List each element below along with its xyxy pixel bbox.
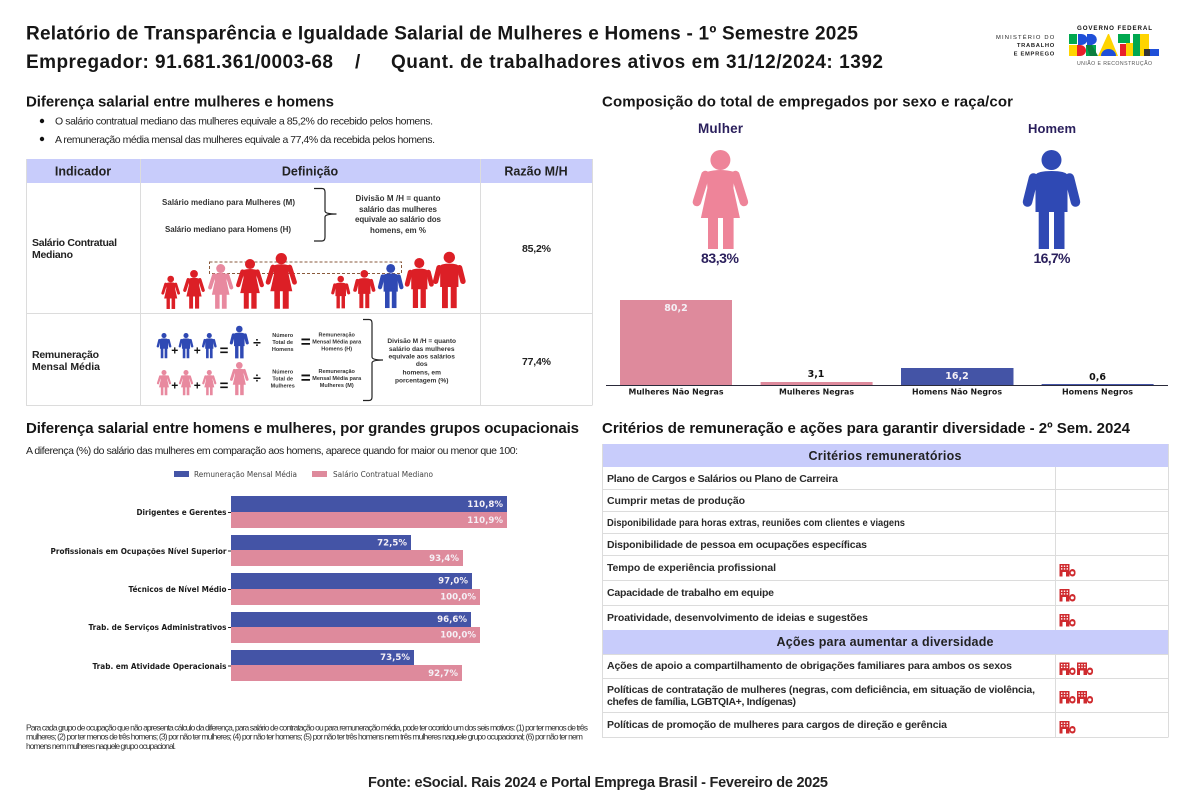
ministry name: TRABALHO [1017, 43, 1055, 49]
row: average monthly pay: = [301, 368, 311, 388]
row: average monthly pay: Mensal Média para [312, 340, 362, 346]
table header: Definição [282, 164, 338, 178]
row: average monthly pay: Número [272, 333, 294, 339]
title: report heading [26, 24, 883, 73]
bar chart: pay ratio by occupation: 97,0% [438, 576, 468, 586]
footnote [26, 722, 588, 751]
bar chart: pay ratio by occupation: 93,4% [429, 554, 459, 564]
heading: occupational groups: Diferença salarial entre homens e mulheres, por grandes grupos ocupacionais [26, 420, 579, 437]
bar chart: workforce by sex and race: 16,2 [945, 371, 969, 382]
action rows: Políticas de promoção de mulheres para cargos de direção e gerência [607, 719, 947, 731]
bar chart: pay ratio by occupation: 100,0% [440, 592, 476, 602]
row: average monthly pay: salário das mulheres [389, 346, 455, 353]
bar chart: workforce by sex and race: 3,1 [808, 369, 824, 380]
row: average monthly pay: ÷ [253, 334, 261, 350]
bar chart: pay ratio by occupation: 96,6% [437, 615, 467, 625]
tagline: UNIÃO E RECONSTRUÇÃO [1077, 60, 1152, 67]
text block: key findings: A remuneração média mensal das mulheres equivale a 77,4% da recebida pelos homens. [55, 134, 435, 146]
bar chart: pay ratio by occupation: Profissionais em Ocupações Nível Superior [50, 547, 227, 556]
panel: men share: Homem [1028, 121, 1076, 136]
table header: Indicador [55, 164, 111, 178]
criteria rows: Capacidade de trabalho em equipe [607, 587, 774, 599]
icons: company markers [1060, 564, 1093, 734]
row: average monthly pay: porcentagem (%) [395, 378, 448, 384]
action rows: chefes de família, LGBTQIA+, Indígenas) [607, 696, 796, 708]
footnote: homens nem mulheres naquele grupo ocupacional. [26, 741, 176, 751]
criteria rows: Plano de Cargos e Salários ou Plano de Carreira [607, 473, 838, 485]
row: average monthly pay: Divisão M /H = quanto [387, 338, 456, 345]
criteria rows: Tempo de experiência profissional [607, 562, 776, 574]
row: average monthly pay: + [194, 378, 201, 392]
panel: women share [697, 121, 744, 266]
action rows: Ações de apoio a compartilhamento de obrigações familiares para ambos os sexos [607, 660, 1012, 672]
bar chart: pay ratio by occupation: 110,9% [467, 516, 503, 526]
row: median contractual salary: homens, em % [370, 226, 426, 235]
ministry name: MINISTÉRIO DO [996, 34, 1055, 41]
action rows: Políticas de contratação de mulheres (negras, com deficiência, em situação de violência, [607, 684, 1035, 696]
bar chart: pay ratio by occupation: Técnicos de Nível Médio [128, 584, 227, 594]
row: average monthly pay: homens, em [402, 370, 441, 376]
title: report heading: Quant. de trabalhadores ativos em 31/12/2024: 1392 [391, 52, 883, 73]
row: average monthly pay: = [220, 378, 229, 394]
row: average monthly pay: Homens [272, 347, 294, 353]
bar chart: pay ratio by occupation: Trab. em Atividade Operacionais [92, 662, 227, 671]
row: median contractual salary: Salário mediano para Homens (H) [165, 225, 291, 234]
row: median contractual salary: Salário mediano para Mulheres (M) [162, 198, 295, 207]
criteria rows: Cumprir metas de produção [607, 495, 745, 507]
panel: men share [1028, 121, 1076, 266]
row: average monthly pay: Mensal Média [32, 361, 100, 373]
row: average monthly pay: Homens (H) [321, 346, 352, 352]
title: report heading: Relatório de Transparência e Igualdade Salarial de Mulheres e Homens - 1º Semestre 2025 [26, 24, 858, 44]
bar chart: workforce by sex and race: 80,2 [664, 303, 688, 314]
bar chart: workforce by sex and race: Homens Não Negros [912, 388, 1002, 396]
row: average monthly pay: Mulheres [271, 384, 295, 390]
heading: composition of workforce: Composição do total de empregados por sexo e raça/cor [602, 94, 1013, 110]
footnote: mulheres; (2) por ter menos de três homens; (3) por não ter mulheres; (4) por não ter homens; (5) por não ter três homens nem três mulheres naquele grupo ocupacional; (6) por não ter nem [26, 732, 583, 742]
heading: remuneration criteria: Critérios de remuneração e ações para garantir diversidade - 2º Sem. 2024 [602, 420, 1131, 437]
row: median contractual salary: 85,2% [522, 243, 552, 255]
row: average monthly pay: Número [272, 370, 294, 376]
row: average monthly pay [32, 320, 552, 400]
text block: key findings: O salário contratual mediano das mulheres equivale a 85,2% do recebido pelos homens. [55, 116, 433, 128]
panel: women share: Mulher [698, 121, 744, 136]
footnote: Para cada grupo de ocupação que não apresenta cálculo da diferença, para salário de contratação ou para remuneração média, pode ter ocorrido um dos seis motivos: (1) por ter menos de três [26, 722, 588, 732]
header: diversity actions [602, 630, 1168, 654]
criteria rows: Proatividade, desenvolvimento de ideias e sugestões [607, 612, 868, 624]
panel: indicators table [26, 159, 592, 406]
row: median contractual salary: Mediano [32, 249, 73, 261]
panel: men share: 16,7% [1034, 250, 1071, 266]
legend: Remuneração Mensal Média [194, 469, 297, 479]
bar chart: workforce by sex and race: Homens Negros [1062, 388, 1133, 396]
bar chart: pay ratio by occupation: 92,7% [428, 669, 458, 679]
source note: Fonte: eSocial. Rais 2024 e Portal Emprega Brasil - Fevereiro de 2025 [368, 775, 828, 791]
bar chart: pay ratio by occupation [50, 496, 507, 681]
row: average monthly pay: 77,4% [522, 356, 552, 368]
row: average monthly pay: Total de [272, 376, 293, 382]
bar chart: workforce by sex and race: 0,6 [1089, 372, 1106, 383]
header: diversity actions: Ações para aumentar a diversidade [776, 635, 994, 649]
ministry name: E EMPREGO [1014, 52, 1055, 58]
row: average monthly pay: + [171, 344, 178, 358]
criteria rows [607, 473, 905, 624]
criteria rows: Disponibilidade para horas extras, reuniões com clientes e viagens [607, 517, 905, 529]
bar chart: workforce by sex and race: Mulheres Não Negras [628, 388, 724, 396]
row: median contractual salary: Divisão M /H = quanto [356, 194, 441, 203]
governo federal label: GOVERNO FEDERAL [1077, 25, 1152, 32]
row: average monthly pay: + [171, 378, 178, 392]
heading: salary difference: Diferença salarial entre mulheres e homens [26, 94, 334, 110]
legend: Salário Contratual Mediano [333, 470, 433, 479]
row: median contractual salary: Salário Contratual [32, 237, 117, 249]
row: average monthly pay: + [194, 344, 201, 358]
row: average monthly pay: = [301, 332, 311, 352]
row: average monthly pay: dos [416, 361, 428, 368]
brasil wordmark [1069, 34, 1159, 56]
bar chart: pay ratio by occupation: Dirigentes e Gerentes [136, 508, 227, 517]
panel: women share: 83,3% [701, 250, 740, 266]
table header [26, 159, 592, 183]
ministry name [996, 34, 1055, 58]
row: median contractual salary: salário das mulheres [359, 205, 438, 214]
row: average monthly pay: Remuneração [319, 332, 356, 338]
bar chart: pay ratio by occupation: 100,0% [440, 630, 476, 640]
legend [174, 469, 433, 479]
row: average monthly pay: Total de [272, 340, 293, 346]
table header: Razão M/H [504, 164, 568, 178]
row: average monthly pay: Remuneração [32, 349, 99, 361]
row: median contractual salary [32, 188, 552, 309]
row: median contractual salary: equivale ao salário dos [355, 215, 442, 224]
bar chart: workforce by sex and race: Mulheres Negras [779, 388, 854, 396]
row: average monthly pay: Mulheres (M) [320, 383, 354, 389]
bar chart: workforce by sex and race [606, 300, 1168, 396]
row: average monthly pay: = [220, 342, 229, 360]
title: report heading: / [355, 52, 361, 73]
row: average monthly pay: equivale aos salários [389, 354, 455, 360]
text block: key findings [40, 116, 435, 146]
bar chart: pay ratio by occupation: 73,5% [380, 653, 410, 663]
bar chart: pay ratio by occupation: 110,8% [467, 500, 503, 510]
header: remuneration criteria: Critérios remuneratórios [808, 449, 962, 463]
title: report heading: Empregador: 91.681.361/0003-68 [26, 52, 333, 73]
row: average monthly pay: ÷ [253, 370, 261, 386]
panel: criteria table [602, 444, 1168, 738]
header: remuneration criteria [602, 444, 1168, 467]
row: average monthly pay: Mensal Média para [312, 376, 362, 382]
row: average monthly pay: Remuneração [319, 369, 356, 375]
bar chart: pay ratio by occupation: 72,5% [377, 538, 407, 548]
text block: chart description: A diferença (%) do salário das mulheres em comparação aos homens, aparece quando for maior ou menor que 100: [26, 445, 518, 457]
logo: ministry and federal government [996, 25, 1159, 67]
bar chart: pay ratio by occupation: Trab. de Serviços Administrativos [88, 623, 227, 632]
criteria rows: Disponibilidade de pessoa em ocupações específicas [607, 539, 867, 551]
action rows [607, 660, 1035, 731]
